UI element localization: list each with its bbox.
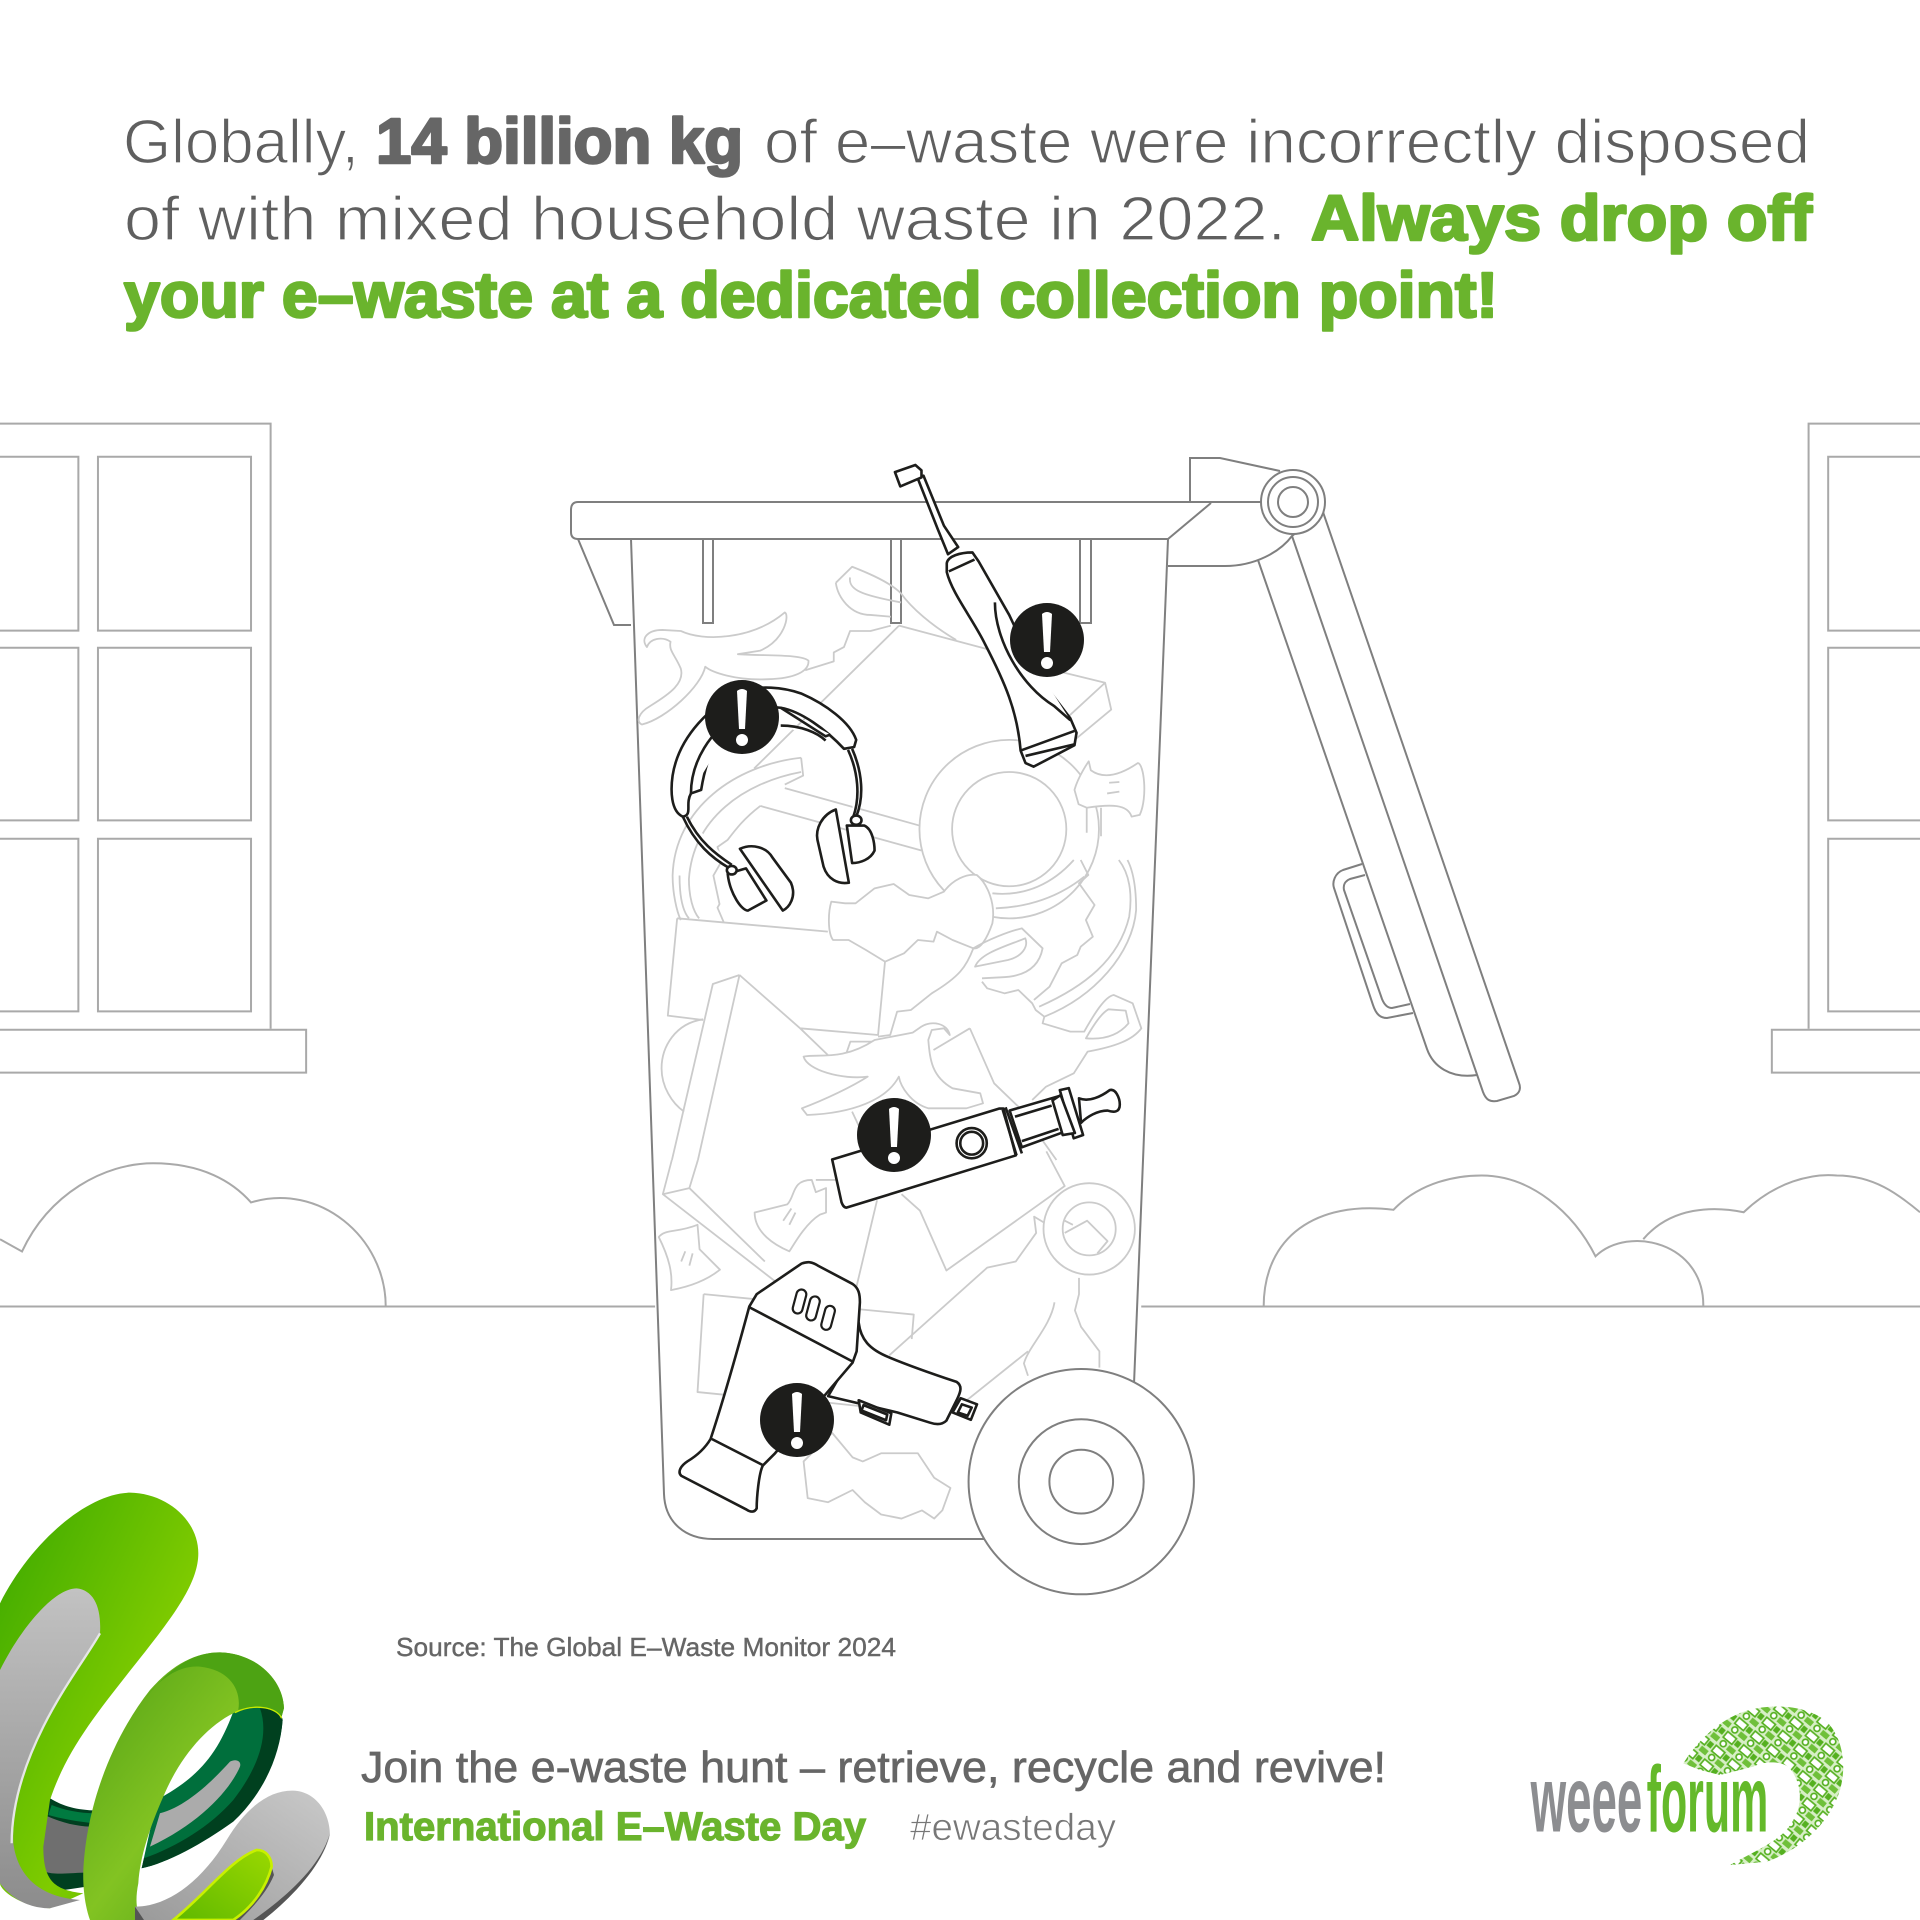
title: Globally, (123, 108, 359, 177)
headphones (672, 688, 875, 911)
discarded waste, upper (639, 567, 1144, 922)
source note: Source: The Global E–Waste Monitor 2024 (396, 1632, 896, 1662)
title: of with mixed household waste in 2022. (124, 185, 1286, 254)
weee forum logo (1530, 1706, 1843, 1865)
vape pen (832, 1088, 1120, 1208)
title: your e–waste at a dedicated collection point! (124, 259, 1498, 331)
bushes (0, 1163, 1920, 1307)
weee forum logo: forum (1647, 1748, 1768, 1852)
bin body (631, 539, 1168, 1539)
electric toothbrush (895, 465, 1077, 767)
window right (1772, 424, 1920, 1073)
open lid arm (1258, 512, 1520, 1101)
title (123, 105, 1813, 331)
warning badge headphones (705, 680, 779, 754)
international e-waste day: International E–Waste Day (364, 1805, 867, 1849)
campaign slogan: Join the e-waste hunt – retrieve, recycle and revive! (361, 1743, 1386, 1792)
hashtag: #ewasteday (910, 1807, 1116, 1849)
lid flaps (578, 539, 1091, 625)
title: Always drop off (1311, 182, 1813, 254)
bin wheel (969, 1369, 1194, 1594)
weee forum logo: weee (1530, 1748, 1642, 1852)
e-waste day 3D logo (0, 1493, 330, 1920)
logo swirl of devices (1683, 1706, 1843, 1865)
discarded waste, lower (659, 1151, 1135, 1519)
warning badge vape (857, 1098, 931, 1172)
window left (0, 424, 306, 1073)
title: 14 billion kg (376, 105, 743, 177)
warning badge toothbrush (1010, 603, 1084, 677)
hair dryer (680, 1262, 977, 1512)
street background (0, 424, 1920, 1307)
warning badge hair dryer (760, 1383, 834, 1457)
lid hinge (1168, 458, 1325, 566)
lid (571, 502, 1261, 539)
title: of e–waste were incorrectly disposed (764, 108, 1810, 177)
discarded waste, middle (662, 860, 1141, 1160)
wheelie bin (571, 458, 1520, 1539)
